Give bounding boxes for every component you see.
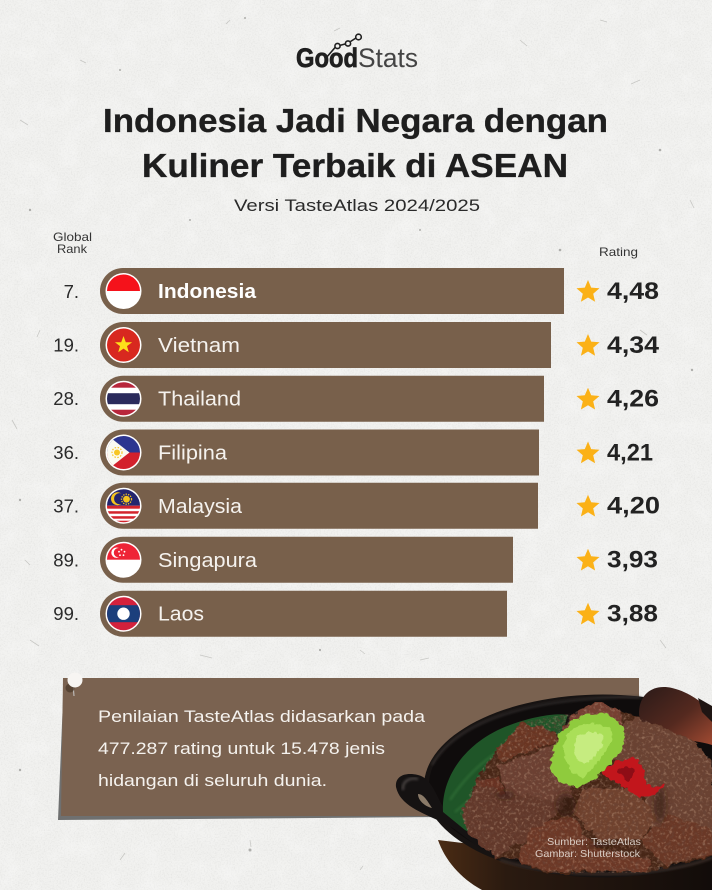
row: Laos: 99. [53, 603, 79, 624]
row: Laos: 3,88 [607, 601, 658, 628]
meat grain [460, 702, 712, 873]
bowl body [438, 840, 712, 890]
red chili garnish [602, 758, 665, 797]
row: Malaysia: Malaysia [158, 496, 243, 518]
row: Vietnam: Vietnam [158, 335, 240, 357]
row: Singapura: Singapura [158, 550, 258, 572]
row: Filipina: 4,21 [607, 440, 653, 466]
meat crumbs [460, 702, 712, 873]
row: Filipina: 36. [53, 442, 79, 463]
logo wordmark: Good [296, 43, 358, 73]
row: Indonesia [64, 268, 659, 314]
column header: global rank: Global [53, 230, 92, 244]
rendang meat [460, 702, 712, 873]
title: Indonesia Jadi Negara dengan [103, 102, 608, 139]
row: Vietnam [53, 322, 660, 368]
source credit: Sumber: TasteAtlas [547, 836, 641, 848]
row: Laos: Laos [158, 604, 204, 626]
banana leaf [443, 714, 568, 850]
image: bowl of rendang [396, 687, 712, 890]
row: Indonesia: 7. [64, 281, 79, 302]
column header: global rank [53, 230, 92, 256]
flag: Vietnam [106, 327, 142, 363]
flag: Indonesia [106, 273, 142, 309]
callout text: 477.287 rating untuk 15.478 jenis [98, 740, 385, 758]
callout text [98, 708, 426, 790]
row: Thailand: Thailand [158, 389, 241, 411]
logo line chart icon [326, 34, 361, 58]
column header: rating: Rating [599, 245, 638, 259]
callout text: hidangan di seluruh dunia. [98, 772, 327, 790]
row: Thailand: 4,26 [607, 386, 659, 413]
lettuce garnish [550, 713, 625, 786]
source credit: Gambar: Shutterstock [535, 848, 641, 860]
row: Laos [53, 591, 658, 637]
title: Kuliner Terbaik di ASEAN [142, 147, 568, 184]
row: Malaysia [53, 483, 660, 529]
row: Vietnam: 19. [53, 334, 79, 356]
flag: Malaysia [106, 488, 142, 524]
row: Singapura: 89. [53, 550, 79, 570]
row: Thailand: 28. [53, 388, 79, 409]
source credit [535, 836, 641, 860]
flag: Singapura [106, 542, 142, 578]
logo wordmark: Stats [358, 43, 418, 73]
flag: Filipina [106, 434, 142, 470]
spoon [639, 687, 712, 745]
flag: Laos [106, 596, 142, 632]
row: Singapura [53, 537, 658, 583]
row: Vietnam: 4,34 [607, 332, 660, 359]
meat shadows [495, 787, 666, 848]
row: Singapura: 3,93 [607, 547, 658, 574]
pin [66, 672, 82, 696]
title [103, 102, 608, 184]
row: Filipina: Filipina [158, 442, 228, 464]
subtitle: Versi TasteAtlas 2024/2025 [234, 196, 480, 215]
flag: Thailand [106, 381, 142, 417]
column header: global rank: Rank [57, 242, 88, 256]
row: Filipina [53, 430, 653, 476]
bowl handle [396, 774, 483, 850]
row: Indonesia: 4,48 [607, 278, 659, 305]
row: Malaysia: 37. [53, 496, 79, 516]
callout panel [58, 672, 639, 820]
row: Thailand [53, 376, 659, 422]
logo: GoodStats [296, 34, 418, 73]
row: Malaysia: 4,20 [607, 493, 660, 520]
row: Indonesia: Indonesia [158, 281, 257, 303]
callout text: Penilaian TasteAtlas didasarkan pada [98, 708, 426, 726]
bowl rim [424, 694, 712, 878]
